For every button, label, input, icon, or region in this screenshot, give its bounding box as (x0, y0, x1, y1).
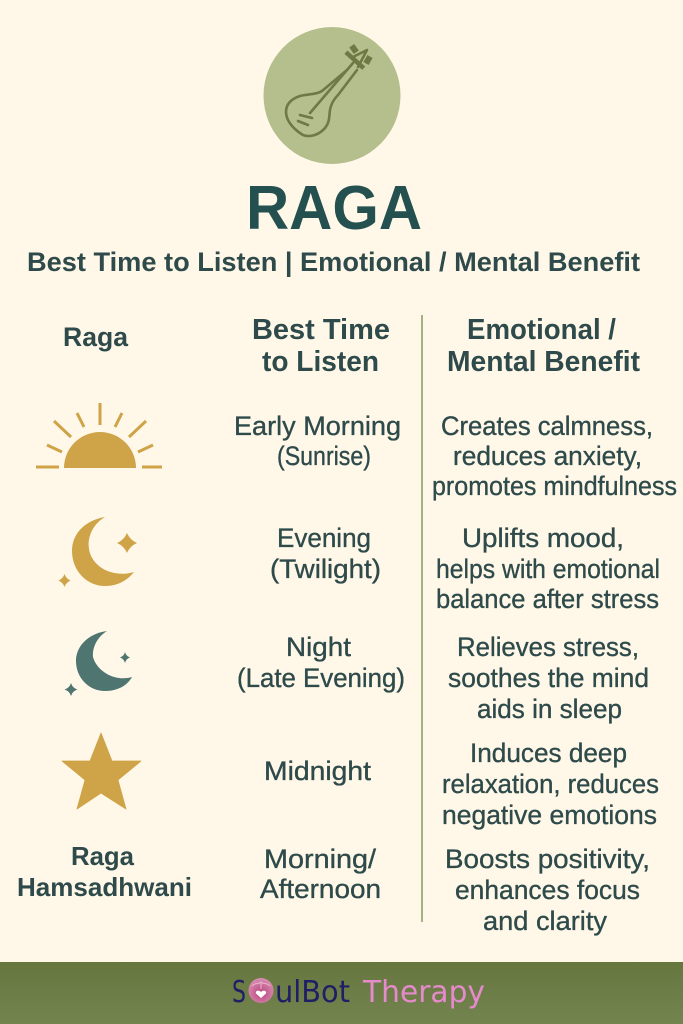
row 2: time (270, 523, 381, 584)
icon: teal crescent moon with stars (64, 631, 132, 696)
row 2: time: (Twilight) (270, 554, 381, 584)
row 4: benefit: Induces deep (470, 738, 627, 768)
row 4: benefit (442, 738, 659, 830)
row 2: benefit (436, 523, 660, 614)
row 2: benefit: helps with emotional (436, 554, 660, 584)
footer logo: SoulBot Therapy: ulBot (275, 975, 350, 1010)
row 3: time: Night (286, 632, 352, 662)
row 3: benefit: aids in sleep (477, 694, 622, 724)
row 3: benefit: soothes the mind (448, 663, 649, 693)
row 5: benefit: enhances focus (455, 875, 640, 905)
row 5: time: Morning/ (264, 844, 377, 874)
row 3: benefit (448, 632, 649, 724)
footer logo: SoulBot Therapy (232, 975, 485, 1010)
raga name: Raga Hamsadhwani: Raga (71, 841, 135, 871)
column header: Best Time to Listen: Best Time (252, 314, 390, 346)
row 3: benefit: Relieves stress, (457, 632, 639, 662)
footer logo: SoulBot Therapy: S (232, 975, 246, 1010)
column divider (421, 315, 423, 922)
raga name: Raga Hamsadhwani (17, 841, 192, 902)
row 5: benefit: and clarity (483, 906, 607, 936)
row 1: time: (Sunrise) (277, 441, 371, 471)
row 3: time: (Late Evening) (237, 663, 405, 693)
row 1: time: Early Morning (234, 411, 401, 441)
icon: gold crescent moon with stars (58, 517, 137, 587)
column header: Emotional / Mental Benefit: Emotional / (467, 314, 616, 346)
column header: Raga: Raga (63, 322, 128, 352)
icon: brain with heart (248, 978, 274, 1003)
icon: gold star (62, 733, 141, 809)
row 1: benefit (432, 411, 677, 501)
row 2: time: Evening (277, 523, 371, 553)
row 4: benefit: relaxation, reduces (442, 769, 659, 799)
row 1: benefit: Creates calmness, (441, 411, 653, 441)
icon: sitar in green circle (264, 27, 400, 164)
row 2: benefit: balance after stress (436, 584, 659, 614)
column header: Best Time to Listen (252, 314, 390, 378)
raga name: Raga Hamsadhwani: Hamsadhwani (17, 872, 192, 902)
icon: sunrise (36, 403, 162, 468)
column header: Emotional / Mental Benefit: Mental Benefit (447, 346, 640, 378)
row 1: benefit: reduces anxiety, (453, 441, 642, 471)
column header: Best Time to Listen: to Listen (262, 346, 379, 378)
footer band (0, 962, 683, 1024)
row 5: benefit (445, 844, 650, 936)
row 1: time (234, 411, 401, 471)
subtitle: Best Time to Listen | Emotional / Mental Benefit (27, 247, 640, 277)
row 4: benefit: negative emotions (442, 800, 657, 830)
row 5: time: Afternoon (260, 874, 381, 904)
column header: Emotional / Mental Benefit (447, 314, 640, 378)
row 2: benefit: Uplifts mood, (462, 523, 624, 553)
title: RAGA (246, 174, 422, 243)
row 3: time (237, 632, 405, 693)
row 5: benefit: Boosts positivity, (445, 844, 650, 874)
row 4: time: Midnight (264, 756, 372, 786)
row 5: time (260, 844, 381, 904)
footer logo: SoulBot Therapy: Therapy (362, 975, 485, 1010)
